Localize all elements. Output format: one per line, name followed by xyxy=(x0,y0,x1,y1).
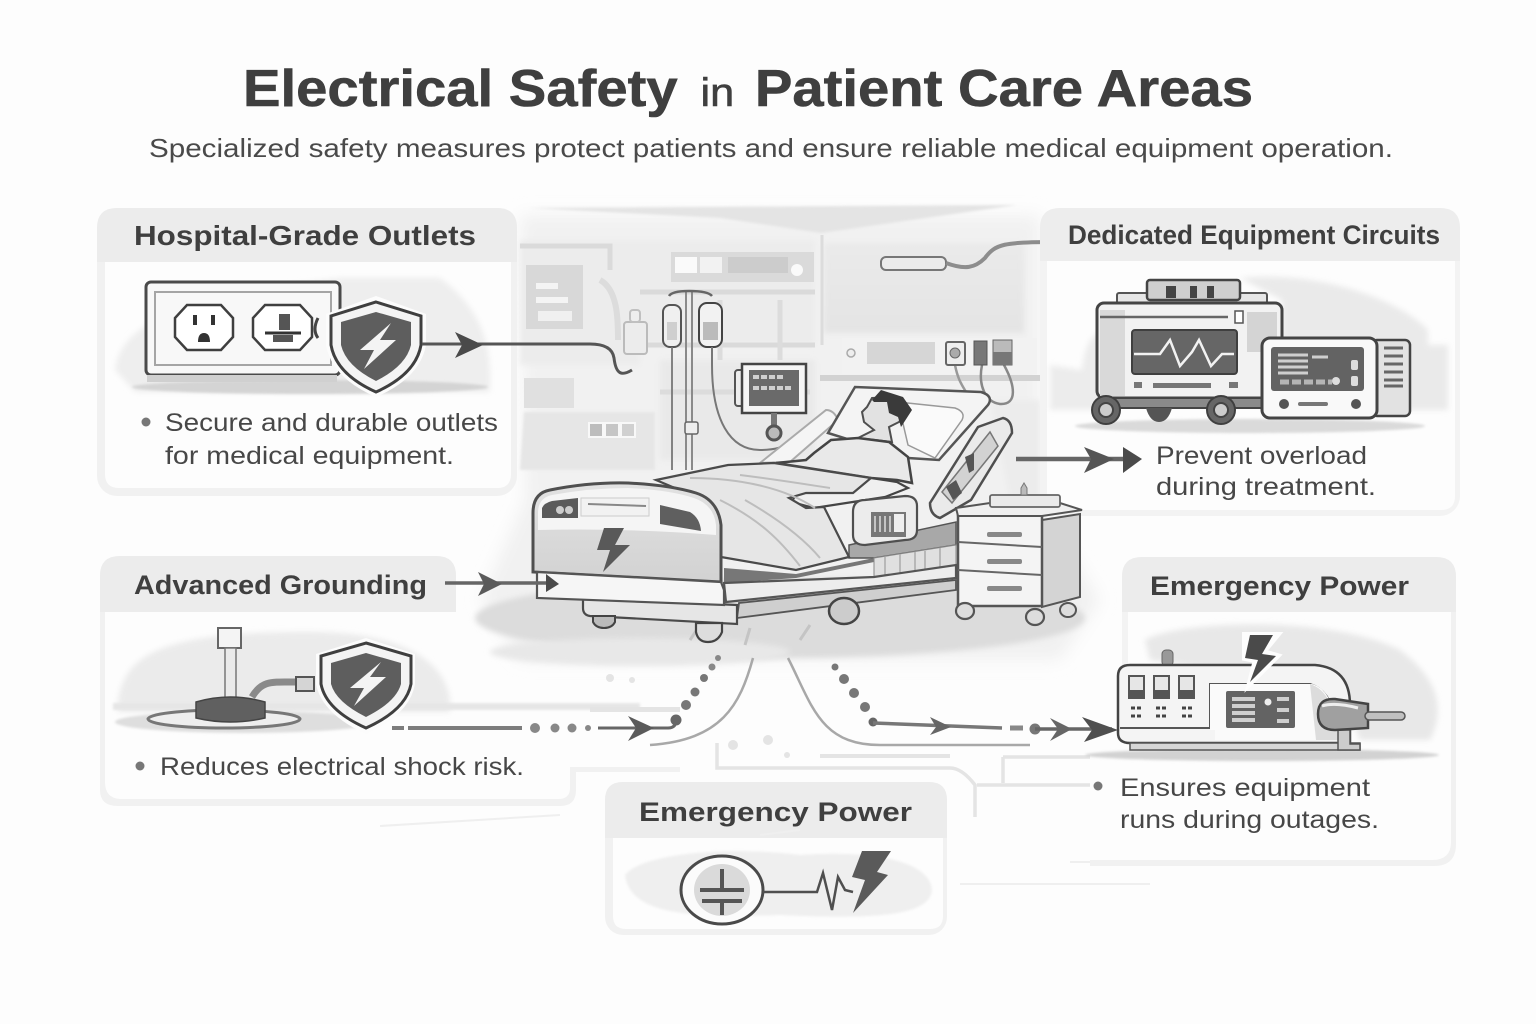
panel: Dedicated Equipment Circuits xyxy=(1040,208,1460,516)
heading: Emergency Power xyxy=(639,797,913,827)
backrest and pillow xyxy=(828,387,990,460)
bed rail left of patient xyxy=(760,410,838,463)
bedside monitor xyxy=(735,364,806,440)
wall socket device xyxy=(624,310,647,354)
ceiling lamp and cable xyxy=(881,242,1053,270)
arrow: dotted to grounding xyxy=(392,655,721,741)
bullet text xyxy=(142,409,498,470)
arrow: bed to circuits xyxy=(1016,447,1142,473)
background room scene xyxy=(475,205,1100,666)
patient xyxy=(776,390,912,508)
heading: Advanced Grounding xyxy=(134,570,427,600)
panel: Hospital-Grade Outlets xyxy=(97,208,517,496)
arrow: grounding to bed xyxy=(445,572,559,596)
icon: small monitor xyxy=(1262,338,1410,418)
footboard with bolt xyxy=(533,483,721,582)
curved grey connectors xyxy=(650,658,1030,745)
bullet text: Secure and durable outlets xyxy=(165,409,498,437)
icon: generator xyxy=(1118,635,1405,750)
control panel xyxy=(853,496,917,545)
faint dots xyxy=(590,674,950,758)
floor shadow xyxy=(475,578,1085,658)
under-bed mechanism xyxy=(724,522,956,583)
hospital bed with patient xyxy=(533,291,1082,642)
bullet text: runs during outages. xyxy=(1120,806,1379,834)
bullet text: Ensures equipment xyxy=(1120,774,1370,802)
heading: Hospital-Grade Outlets xyxy=(134,220,476,251)
icon: outlet plate xyxy=(146,282,340,382)
icon: shield xyxy=(316,638,415,734)
bullet text xyxy=(1094,774,1379,834)
bullet text: Reduces electrical shock risk. xyxy=(160,753,524,781)
heading: Emergency Power xyxy=(1150,571,1410,601)
arrow: outlets to room xyxy=(422,332,632,373)
panel: Emergency Power right xyxy=(1085,557,1456,866)
wheels xyxy=(593,598,859,642)
subtitle: Specialized safety measures protect patients and ensure reliable medical equipment operation. xyxy=(149,133,1393,163)
icon: large monitor cart xyxy=(1092,280,1282,424)
panel: Advanced Grounding xyxy=(100,556,680,806)
iv pole xyxy=(663,291,795,470)
bed frame xyxy=(583,565,956,624)
title: Electrical Safety in Patient Care Areas xyxy=(243,60,1253,118)
side rail xyxy=(930,418,1012,518)
panel: Dedicated Equipment Circuits: during treatment. xyxy=(1156,473,1376,501)
nightstand xyxy=(956,483,1082,625)
heading: Dedicated Equipment Circuits xyxy=(1068,220,1440,250)
icon: shield xyxy=(326,296,426,397)
bullet text: for medical equipment. xyxy=(165,442,454,470)
faint decorative lines xyxy=(380,815,1150,884)
body text: Prevent overload xyxy=(1156,442,1367,470)
panel: Emergency Power bottom xyxy=(605,782,947,935)
icon: grounding rod xyxy=(148,628,314,728)
under-bed slats xyxy=(874,545,956,577)
blanket xyxy=(656,463,871,570)
arrow: dotted to emergency power xyxy=(832,664,1118,742)
bumper xyxy=(537,572,724,605)
wall outlets xyxy=(946,340,1013,404)
circuit trace lines xyxy=(717,743,1090,817)
icon: ground symbol with bolt xyxy=(681,851,891,924)
